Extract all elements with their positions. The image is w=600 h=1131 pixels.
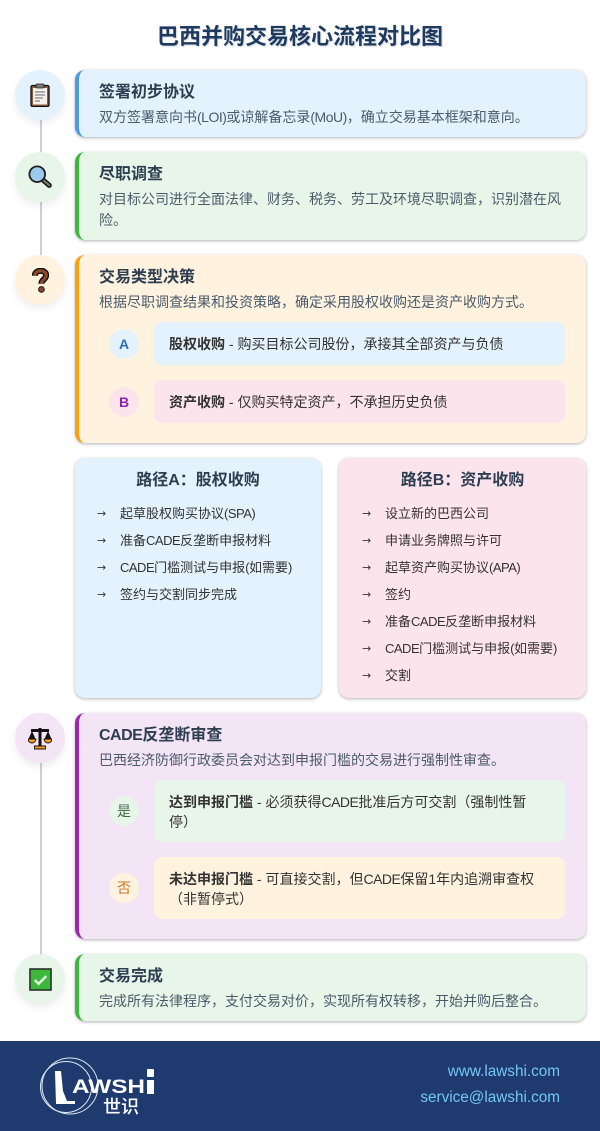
- list: path B: →: [362, 534, 371, 547]
- list: path B: →: [362, 507, 371, 520]
- option B: 资产收购 - 仅购买特定资产，不承担历史负债: [169, 394, 447, 410]
- heading: step 3: 交易类型决策: [99, 269, 195, 286]
- logo: 世识: [103, 1093, 139, 1119]
- list: path A: →: [97, 507, 106, 520]
- list: path A: →: [97, 588, 106, 601]
- text: step 4: 巴西经济防御行政委员会对达到申报门槛的交易进行强制性审查。: [99, 752, 505, 768]
- list: path A: 准备CADE反垄断申报材料: [120, 533, 271, 548]
- list: path B: 设立新的巴西公司: [385, 506, 489, 521]
- text: step 2: 对目标公司进行全面法律、财务、税务、劳工及环境尽职调查，识别潜在风险。: [99, 191, 561, 228]
- heading: step 1: 签署初步协议: [99, 84, 195, 101]
- list: path B: [362, 506, 557, 683]
- list: path B: 交割: [385, 668, 411, 683]
- panel: step 5: [75, 954, 586, 1021]
- list: path A: CADE门槛测试与申报(如需要): [120, 560, 292, 575]
- icon: magnifier: [15, 152, 65, 202]
- icon: clipboard: [15, 70, 65, 120]
- logo: AWSH: [72, 1077, 145, 1098]
- option yes: [154, 780, 565, 842]
- title: 巴西并购交易核心流程对比图: [157, 24, 443, 49]
- list: path A: 签约与交割同步完成: [120, 587, 237, 602]
- panel: step 1: [75, 70, 586, 137]
- list: path B: 准备CADE反垄断申报材料: [385, 614, 536, 629]
- option yes: 达到申报门槛 - 必须获得CADE批准后方可交割（强制性暂: [169, 794, 526, 810]
- badge B: [109, 387, 139, 417]
- option B: [154, 380, 565, 423]
- option A: [154, 322, 565, 365]
- contact: service@lawshi.com: [420, 1089, 560, 1106]
- list: path A: 起草股权购买协议(SPA): [120, 506, 255, 521]
- heading: step 2: 尽职调查: [99, 166, 163, 183]
- badge A: [109, 329, 139, 359]
- heading: step 5: 交易完成: [99, 968, 163, 985]
- list: path B: 起草资产购买协议(APA): [385, 560, 520, 575]
- text: step 3: 根据尽职调查结果和投资策略，确定采用股权收购还是资产收购方式。: [99, 294, 533, 310]
- option A: 股权收购 - 购买目标公司股份，承接其全部资产与负债: [169, 336, 503, 352]
- list: path A: [97, 506, 292, 602]
- panel: step 2: [75, 152, 586, 240]
- list: path B: 申请业务牌照与许可: [385, 533, 502, 548]
- option no: （非暂停式）: [169, 890, 253, 906]
- option no: 未达申报门槛 - 可直接交割，但CADE保留1年内追溯审查权: [169, 871, 534, 887]
- list: path B: →: [362, 669, 371, 682]
- icon: scales: [15, 713, 65, 763]
- option yes: 停）: [169, 814, 197, 830]
- panel: step 3: [75, 255, 586, 443]
- list: path A: →: [97, 561, 106, 574]
- logo: [40, 1058, 154, 1119]
- text: step 1: 双方签署意向书(LOI)或谅解备忘录(MoU)，确立交易基本框架和意向。: [99, 109, 529, 125]
- contact: [420, 1063, 560, 1106]
- badge yes: 是: [117, 803, 131, 819]
- icon: check mark: [15, 954, 65, 1004]
- badge A: A: [119, 336, 129, 352]
- badge yes: [109, 796, 139, 826]
- icon: question mark: [15, 255, 65, 305]
- list: path B: →: [362, 561, 371, 574]
- text: step 5: 完成所有法律程序，支付交易对价，实现所有权转移，开始并购后整合。: [99, 993, 547, 1009]
- panel: path A: [75, 458, 321, 698]
- heading: path A: 路径A：股权收购: [136, 472, 260, 489]
- list: path A: →: [97, 534, 106, 547]
- footer: [0, 1041, 600, 1131]
- contact: www.lawshi.com: [448, 1063, 560, 1080]
- list: path B: →: [362, 588, 371, 601]
- option no: [154, 857, 565, 919]
- badge no: [109, 873, 139, 903]
- heading: step 4: CADE反垄断审查: [99, 727, 222, 744]
- list: path B: →: [362, 642, 371, 655]
- heading: path B: 路径B：资产收购: [401, 472, 524, 489]
- panel: path B: [339, 458, 586, 698]
- badge B: B: [119, 394, 129, 410]
- list: path B: 签约: [385, 587, 411, 602]
- panel: step 4: [75, 713, 586, 939]
- list: path B: →: [362, 615, 371, 628]
- list: path B: CADE门槛测试与申报(如需要): [385, 641, 557, 656]
- badge no: 否: [117, 880, 131, 896]
